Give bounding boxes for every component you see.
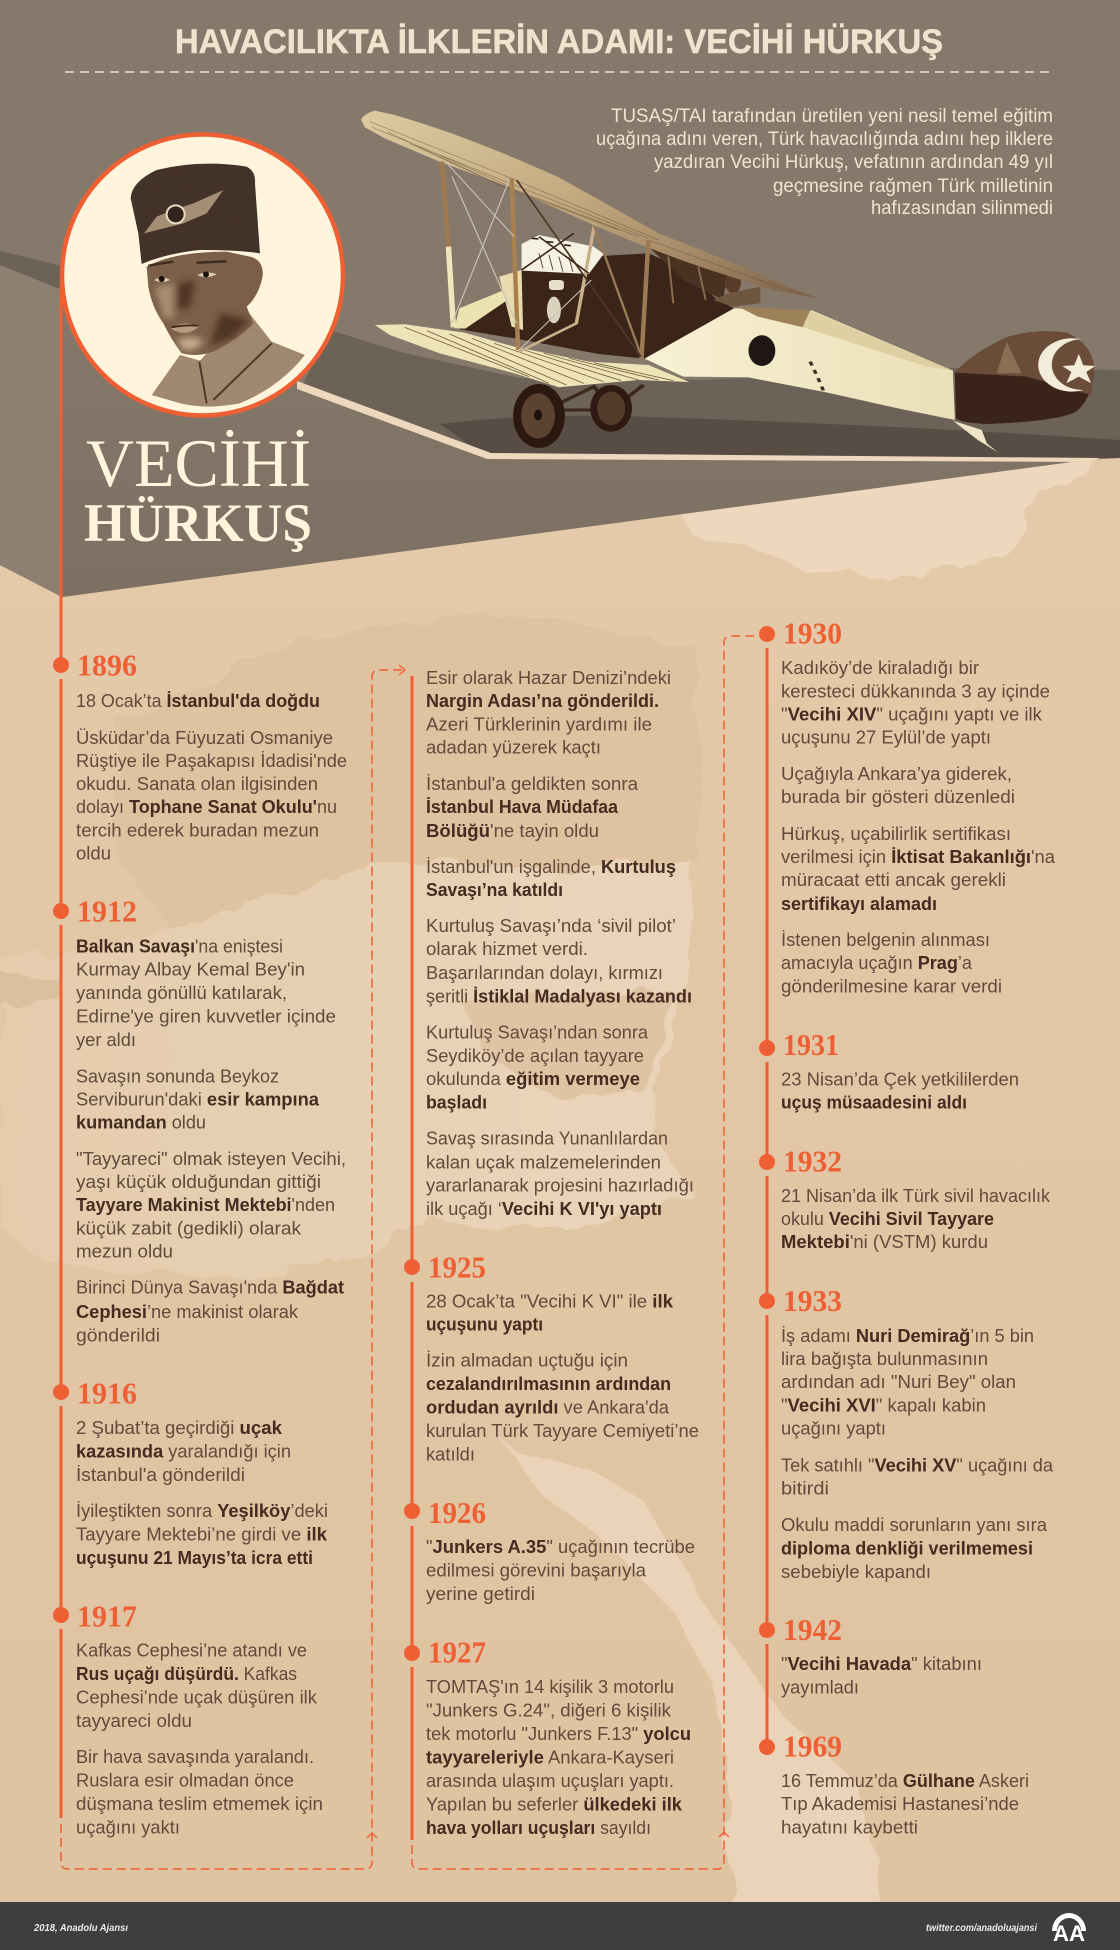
entry: 1917: uçağını yaktı (76, 1818, 180, 1838)
header background shapes (0, 0, 1120, 597)
entry: 1932: okulu Vecihi Sivil Tayyare (781, 1209, 994, 1229)
entry: 1917 continued: Kurtuluş Savaşı’ndan sonra (426, 1022, 649, 1042)
entry: 1932: 21 Nisan’da ilk Türk sivil havacılık (781, 1186, 1051, 1206)
upper wing (361, 111, 819, 299)
entry: 1917 continued: kalan uçak malzemelerinden (426, 1152, 661, 1172)
entry: 1926: edilmesi görevini başarıyla (426, 1560, 647, 1580)
name heading: HÜRKUŞ (84, 493, 312, 553)
entry: 1917: tayyareci oldu (76, 1711, 192, 1731)
entry: 1917: Kafkas Cephesi’ne atandı ve (76, 1640, 307, 1660)
entry: 1896: tercih ederek buradan mezun (76, 820, 319, 840)
entry: 1931: 1931 (783, 1027, 839, 1062)
entry: 1930: keresteci dükkanında 3 ay içinde (781, 682, 1050, 702)
icon: agency logo: AA (1053, 1921, 1085, 1946)
entry: 1933: Okulu maddi sorunların yanı sıra (781, 1515, 1048, 1535)
entry: 1930: gönderilmesine karar verdi (781, 976, 1002, 996)
entry: 1896 (76, 648, 347, 864)
timeline: column 2 line and connector (404, 636, 757, 1869)
entry: 1930: 1930 (783, 616, 842, 650)
entry: 1930: Uçağıyla Ankara’ya giderek, (781, 764, 1012, 784)
entry: 1896: 1896 (77, 648, 137, 682)
entry: 1896: oldu (76, 844, 111, 864)
entry: 1927: tek motorlu "Junkers F.13" yolcu (426, 1724, 691, 1744)
entry: 1912: mezun oldu (76, 1242, 173, 1262)
entry: 1912: gönderildi (76, 1326, 160, 1346)
entry: 1925: İzin almadan uçtuğu için (426, 1350, 628, 1370)
pilot (713, 272, 760, 307)
hat (131, 164, 260, 264)
entry: 1917 continued: adadan yüzerek kaçtı (426, 738, 601, 758)
entry: 1925 (426, 1250, 699, 1464)
entry: 1896: 18 Ocak’ta İstanbul'da doğdu (76, 691, 320, 711)
entry: 1917: Rus uçağı düşürdü. Kafkas (76, 1664, 297, 1684)
entry: 1912: küçük zabit (gedikli) olarak (76, 1218, 302, 1238)
timeline: column 1 line and connector (53, 657, 405, 1869)
entry: 1932: 1932 (783, 1144, 842, 1178)
entry: 1916: 1916 (77, 1376, 137, 1410)
entry: 1912: yanında gönüllü katılarak, (76, 983, 287, 1003)
entry: 1917 continued: Savaşı’na katıldı (426, 880, 563, 900)
entry: 1917 continued: okulunda eğitim vermeye (426, 1069, 640, 1089)
entry: 1917 continued: Esir olarak Hazar Denizi’ndeki (426, 668, 671, 688)
entry: 1933 (781, 1283, 1054, 1582)
intro text: yazdıran Vecihi Hürkuş, vefatının ardından 49 yıl (654, 152, 1053, 173)
entry: 1912: Edirne'ye giren kuvvetler içinde (76, 1006, 336, 1026)
entry: 1917 continued: İstanbul'un işgalinde, Kurtuluş (426, 857, 676, 877)
timeline line behind portrait (60, 285, 62, 665)
entry: 1912: yaşı küçük olduğundan gittiği (76, 1172, 321, 1192)
footer social handle: twitter.com/anadoluajansi (926, 1923, 1037, 1934)
entry: 1942: 1942 (783, 1612, 842, 1647)
entry: 1896: Rüştiye ile Paşakapısı İdadisi'nde (76, 751, 347, 771)
entry: 1933: lira bağışta bulunmasının (781, 1349, 988, 1369)
entry: 1927: arasında ulaşım uçuşları yaptı. (426, 1771, 674, 1791)
entry: 1925: 28 Ocak’ta "Vecihi K VI" ile ilk (426, 1292, 674, 1312)
entry: 1916 (76, 1376, 328, 1568)
lower wing (375, 324, 689, 387)
entry: 1917 continued: Nargin Adası’na gönderildi. (426, 691, 659, 711)
features (154, 272, 217, 282)
name heading: VECİHİ (86, 425, 311, 501)
entry: 1930: Hürkuş, uçabilirlik sertifikası (781, 824, 1011, 844)
entry: 1917 continued: Kurtuluş Savaşı’nda ‘sivil pilot’ (426, 916, 676, 936)
entry: 1916: Tayyare Mektebi’ne girdi ve ilk (76, 1524, 328, 1544)
entry: 1927: Yapılan bu seferler ülkedeki ilk (426, 1794, 683, 1814)
entry: 1926: "Junkers A.35" uçağının tecrübe (426, 1537, 695, 1557)
entry: 1916: İstanbul'a gönderildi (76, 1465, 245, 1485)
entry: 1933: diploma denkliği verilmemesi (781, 1538, 1033, 1558)
tail with crescent and star (953, 331, 1095, 452)
entry: 1925: uçuşunu yaptı (426, 1314, 543, 1334)
entry: 1927: hava yolları uçuşları sayıldı (426, 1818, 651, 1838)
entry: 1930: sertifikayı alamadı (781, 894, 937, 914)
fuselage (644, 307, 955, 420)
struts and wires (442, 162, 706, 359)
entry: 1933: "Vecihi XVI" kapalı kabin (781, 1396, 986, 1416)
entry: 1931: uçuş müsaadesini aldı (781, 1092, 967, 1112)
entry: 1927: tayyareleriyle Ankara-Kayseri (426, 1748, 674, 1768)
entry: 1930 (781, 616, 1056, 996)
entry: 1930: burada bir gösteri düzenledi (781, 787, 1015, 807)
title: HAVACILIKTA İLKLERİN ADAMI: VECİHİ HÜRKUŞ (175, 23, 943, 61)
background: tan paper with map (0, 461, 1092, 1902)
entry: 1917: Bir hava savaşında yaralandı. (76, 1747, 314, 1767)
entry: 1969 (781, 1728, 1029, 1838)
entry: 1927: 1927 (428, 1634, 486, 1670)
entry: 1926: 1926 (428, 1495, 486, 1530)
entry: 1969: hayatını kaybetti (781, 1818, 918, 1838)
timeline: column 3 line (759, 626, 775, 1755)
entry: 1925: katıldı (426, 1444, 475, 1464)
name heading (84, 425, 312, 553)
entry: 1969: 16 Temmuz’da Gülhane Askeri (781, 1771, 1029, 1791)
entry: 1926: yerine getirdi (426, 1584, 535, 1604)
entry: 1917: Cephesi’nde uçak düşüren ilk (76, 1688, 318, 1708)
entry: 1916: uçuşunu 21 Mayıs’ta icra etti (76, 1548, 313, 1568)
entry: 1925: ordudan ayrıldı ve Ankara'da (426, 1398, 670, 1418)
intro text (596, 106, 1053, 219)
entry: 1912: Cephesi’ne makinist olarak (76, 1302, 299, 1322)
entry: 1912: Savaşın sonunda Beykoz (76, 1066, 279, 1086)
entry: 1925: cezalandırılmasının ardından (426, 1374, 671, 1394)
entry: 1912: yer aldı (76, 1030, 136, 1050)
entry: 1930: müracaat etti ancak gerekli (781, 870, 1006, 890)
entry: 1912: Kurmay Albay Kemal Bey'in (76, 960, 305, 980)
entry: 1917 continued: Azeri Türklerinin yardımı ile (426, 714, 652, 734)
entry: 1912 (76, 894, 346, 1346)
entry: 1896: okudu. Sanata olan ilgisinden (76, 774, 318, 794)
entry: 1930: uçuşunu 27 Eylül’de yaptı (781, 728, 991, 748)
jacket (152, 310, 305, 407)
entry: 1933: uçağını yaptı (781, 1418, 886, 1438)
entry: 1933: Tek satıhlı "Vecihi XV" uçağını da (781, 1456, 1054, 1476)
entry: 1942 (781, 1612, 982, 1698)
entry: 1896: dolayı Tophane Sanat Okulu'nu (76, 797, 337, 817)
entry: 1917 continued: başladı (426, 1092, 487, 1112)
entry: 1917 continued: İstanbul'a geldikten sonra (426, 774, 639, 794)
entry: 1917 (76, 1598, 323, 1838)
entry: 1917 continued: ilk uçağı ‘Vecihi K VI'yı yaptı (426, 1199, 662, 1219)
entry: 1916: kazasında yaralandığı için (76, 1442, 291, 1462)
entry: 1917 continued: İstanbul Hava Müdafaa (426, 797, 619, 817)
intro text: hafızasından silinmedi (871, 198, 1053, 219)
entry: 1917 continued: şeritli İstiklal Madalyası kazandı (426, 986, 692, 1006)
entry: 1933: sebebiyle kapandı (781, 1562, 931, 1582)
cowling and nacelle (454, 235, 734, 359)
entry: 1930: amacıyla uçağın Prag’a (781, 953, 973, 973)
entry: 1933: ardından adı "Nuri Bey" olan (781, 1372, 1016, 1392)
entry: 1930: Kadıköy’de kiraladığı bir (781, 658, 979, 678)
entry: 1912: Birinci Dünya Savaşı'nda Bağdat (76, 1278, 344, 1298)
entry: 1917: düşmana teslim etmemek için (76, 1794, 323, 1814)
entry: 1942: "Vecihi Havada" kitabını (781, 1654, 982, 1674)
entry: 1969: Tıp Akademisi Hastanesi’nde (781, 1794, 1019, 1814)
footer credit: 2018, Anadolu Ajansı (33, 1923, 128, 1934)
entry: 1942: yayımladı (781, 1678, 859, 1698)
entry: 1916: İyileştikten sonra Yeşilköy’deki (76, 1501, 328, 1521)
entry: 1927 (426, 1634, 691, 1838)
entry: 1916: 2 Şubat’ta geçirdiği uçak (76, 1418, 283, 1438)
entry: 1930: "Vecihi XIV" uçağını yaptı ve ilk (781, 704, 1043, 724)
entry: 1933: İş adamı Nuri Demirağ’ın 5 bin (781, 1326, 1034, 1346)
entry: 1925: kurulan Türk Tayyare Cemiyeti’ne (426, 1421, 699, 1441)
entry: 1930: verilmesi için İktisat Bakanlığı'na (781, 847, 1056, 867)
entry: 1912: Tayyare Makinist Mektebi'nden (76, 1195, 335, 1215)
entry: 1932: Mektebi'ni (VSTM) kurdu (781, 1232, 988, 1252)
entry: 1912: Balkan Savaşı'na eniştesi (76, 936, 283, 956)
intro text: uçağına adını veren, Türk havacılığında adını hep ilklere (596, 129, 1053, 150)
entry: 1917 continued: olarak hizmet verdi. (426, 939, 588, 959)
entry: 1927: "Junkers G.24", diğeri 6 kişilik (426, 1700, 672, 1720)
entry: 1912: 1912 (77, 894, 137, 928)
illustration: biplane (361, 111, 1095, 452)
entry: 1925: 1925 (428, 1250, 486, 1284)
entry: 1930: İstenen belgenin alınması (781, 930, 990, 950)
intro text: geçmesine rağmen Türk milletinin (773, 176, 1053, 197)
entry: 1896: Üsküdar’da Füyuzati Osmaniye (76, 728, 333, 748)
entry: 1917: 1917 (77, 1598, 137, 1634)
intro text: TUSAŞ/TAI tarafından üretilen yeni nesil temel eğitim (611, 106, 1053, 127)
entry: 1912: Serviburun'daki esir kampına (76, 1090, 320, 1110)
entry: 1927: TOMTAŞ'ın 14 kişilik 3 motorlu (426, 1677, 674, 1697)
face (147, 252, 263, 355)
entry: 1917 continued (426, 668, 694, 1219)
landing gear (513, 384, 643, 448)
entry: 1933: bitirdi (781, 1478, 829, 1498)
entry: 1931 (781, 1027, 1019, 1112)
entry: 1969: 1969 (783, 1728, 842, 1764)
entry: 1917 continued: yararlanarak projesini hazırladığı (426, 1176, 694, 1196)
entry: 1932 (781, 1144, 1051, 1252)
footer bar (0, 1902, 1120, 1950)
entry: 1917 continued: Başarılarından dolayı, kırmızı (426, 963, 663, 983)
portrait (62, 134, 343, 416)
entry: 1912: kumandan oldu (76, 1112, 206, 1132)
entry: 1926 (426, 1495, 695, 1604)
entry: 1917: Ruslara esir olmadan önce (76, 1770, 294, 1790)
entry: 1933: 1933 (783, 1283, 842, 1318)
entry: 1917 continued: Savaş sırasında Yunanlılardan (426, 1128, 668, 1148)
entry: 1917 continued: Seydiköy’de açılan tayyare (426, 1046, 644, 1066)
entry: 1931: 23 Nisan’da Çek yetkililerden (781, 1070, 1019, 1090)
entry: 1917 continued: Bölüğü'ne tayin oldu (426, 821, 599, 841)
entry: 1912: "Tayyareci" olmak isteyen Vecihi, (76, 1149, 346, 1169)
